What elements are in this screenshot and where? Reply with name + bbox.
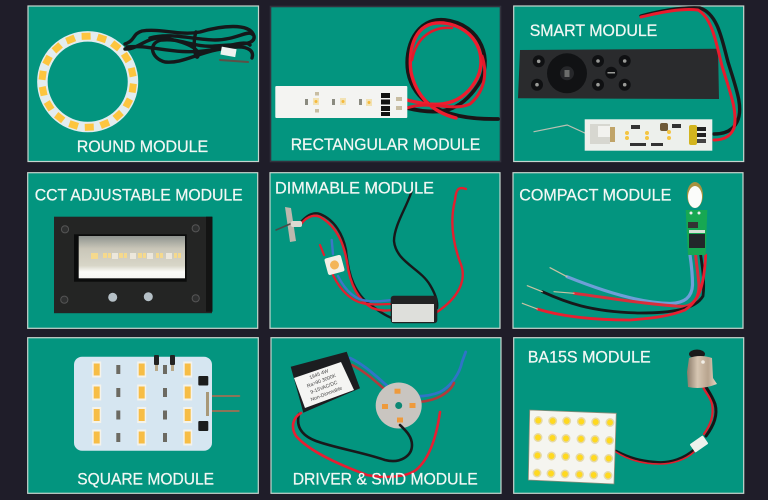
panel: BA15S module	[514, 338, 744, 493]
heading: smart module: SMART MODULE	[530, 21, 657, 40]
panel: driver and SMD module	[271, 338, 501, 493]
icon: black wire bundle	[125, 26, 254, 62]
icon: CCT fixture	[54, 217, 212, 313]
icon: red and black wire	[534, 8, 740, 140]
heading: CCT adjustable module: CCT ADJUSTABLE MODULE	[35, 185, 243, 204]
heading: square module: SQUARE MODULE	[77, 469, 214, 488]
panel: CCT adjustable module	[28, 173, 258, 328]
icon: pins	[204, 396, 239, 411]
icon: inline driver	[391, 296, 437, 323]
icon: potted driver with label: Non-Dimmable	[310, 385, 343, 403]
icon: white connector	[690, 435, 708, 453]
icon: compact module wires	[522, 255, 706, 320]
icon: SMD LED	[324, 255, 345, 275]
icon: remote control	[518, 49, 719, 99]
heading: round module: ROUND MODULE	[77, 137, 208, 156]
icon: rectangular LED board	[275, 86, 407, 118]
icon: potted driver with label	[291, 352, 360, 413]
panel: round module	[28, 6, 258, 162]
panel: compact module	[513, 173, 743, 328]
heading: compact module: COMPACT MODULE	[519, 185, 671, 204]
panel: smart module	[514, 6, 744, 162]
icon: wires to bulb base	[616, 387, 716, 464]
icon: lower wires	[293, 412, 440, 477]
heading: rectangular module: RECTANGULAR MODULE	[291, 135, 480, 154]
icon: square LED board	[74, 355, 212, 451]
icon: smart module circuit board	[585, 119, 712, 151]
heading: driver and SMD module: DRIVER & SMD MODULE	[293, 469, 478, 488]
icon: LED matrix board	[528, 410, 616, 484]
panel: rectangular module	[270, 6, 500, 162]
icon: white connector	[220, 47, 237, 57]
icon: potted driver with label: 9-15VAC/DC	[310, 380, 339, 396]
heading: BA15S module: BA15S MODULE	[528, 348, 651, 367]
icon: white LED and green PCB	[686, 182, 707, 255]
icon: potted driver with label: 1945 4W	[309, 368, 330, 381]
icon: round LED board	[376, 382, 422, 428]
icon: BA15S bulb base	[687, 350, 717, 388]
icon: twisted red and black wire loop	[407, 20, 498, 119]
icon: dimmable module wires	[301, 188, 466, 318]
panel: square module	[28, 338, 258, 493]
heading: dimmable module: DIMMABLE MODULE	[275, 179, 434, 198]
icon: bracket connector	[276, 207, 302, 242]
panel: dimmable module	[270, 173, 500, 328]
icon: blue and red wires	[350, 352, 466, 402]
icon: LED ring	[39, 33, 137, 131]
icon: potted driver with label: Ra>90 3000K	[306, 373, 338, 390]
